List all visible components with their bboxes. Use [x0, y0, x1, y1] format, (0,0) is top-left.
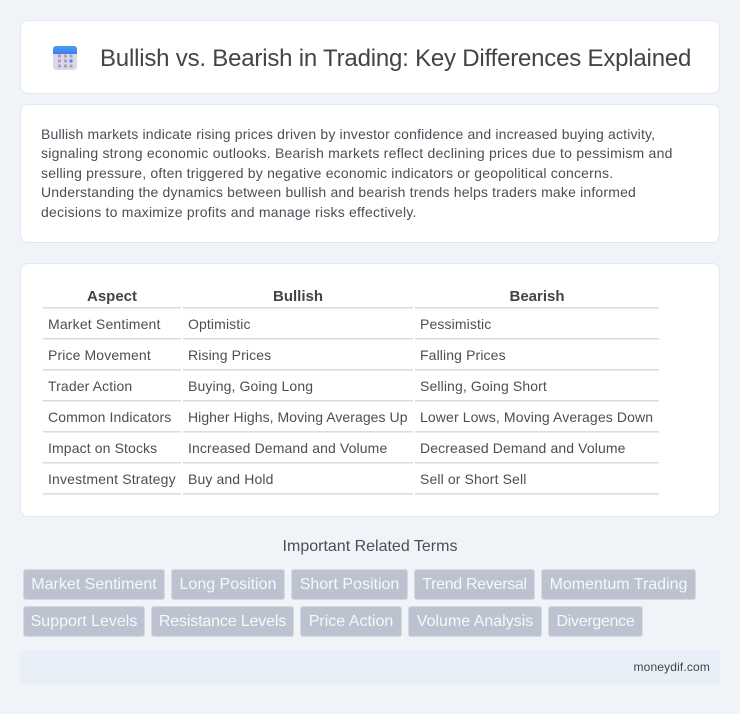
footer bar — [20, 650, 720, 684]
related terms tags — [23, 569, 696, 637]
comparison table: Sell or Short Sell — [420, 471, 526, 487]
related terms tags: Long Position — [180, 576, 276, 593]
intro paragraph: Bullish markets indicate rising prices driven by investor confidence and increased buying activity, — [41, 126, 655, 142]
related terms tags: Momentum Trading — [550, 576, 687, 593]
related terms tags: Support Levels — [31, 613, 137, 630]
comparison table: Trader Action — [48, 378, 132, 394]
comparison table — [43, 288, 659, 495]
comparison table: Price Movement — [48, 347, 151, 363]
intro text panel — [20, 104, 720, 243]
related terms heading: Important Related Terms — [283, 538, 457, 555]
related terms tags: Short Position — [300, 576, 399, 593]
intro paragraph: decisions to maximize profits and manage risks effectively. — [41, 204, 417, 220]
comparison table: Decreased Demand and Volume — [420, 440, 626, 456]
intro paragraph: signaling strong economic outlooks. Bearish markets reflect declining prices due to pessimism and — [41, 145, 673, 161]
comparison table: Common Indicators — [48, 409, 171, 425]
comparison table: Buying, Going Long — [188, 378, 313, 394]
comparison table: Rising Prices — [188, 347, 271, 363]
header panel — [20, 20, 720, 94]
comparison table: Bullish — [273, 288, 323, 305]
comparison table: Higher Highs, Moving Averages Up — [188, 409, 408, 425]
comparison table: Selling, Going Short — [420, 378, 547, 394]
comparison table: Lower Lows, Moving Averages Down — [420, 409, 653, 425]
intro paragraph: selling pressure, often triggered by negative economic indicators or geopolitical concerns. — [41, 165, 613, 181]
footer source: moneydif.com — [634, 660, 710, 674]
comparison table: Buy and Hold — [188, 471, 274, 487]
comparison table: Falling Prices — [420, 347, 506, 363]
comparison table: Aspect — [87, 288, 137, 305]
comparison table: Pessimistic — [420, 316, 491, 332]
title: Bullish vs. Bearish in Trading: Key Differences Explained — [100, 45, 691, 72]
related terms tags: Resistance Levels — [159, 613, 286, 630]
comparison table: Optimistic — [188, 316, 251, 332]
intro paragraph: Understanding the dynamics between bullish and bearish trends helps traders make informed — [41, 184, 636, 200]
related terms tags: Price Action — [309, 613, 393, 630]
related terms tags: Divergence — [557, 613, 634, 630]
intro paragraph — [41, 126, 673, 220]
comparison table: Bearish — [509, 288, 565, 305]
comparison table: Market Sentiment — [48, 316, 161, 332]
comparison table: Impact on Stocks — [48, 440, 157, 456]
comparison table: Investment Strategy — [48, 471, 176, 487]
comparison table panel — [20, 263, 720, 517]
related terms tags: Trend Reversal — [422, 576, 527, 593]
related terms tags: Volume Analysis — [417, 613, 533, 630]
icon: calendar — [53, 46, 77, 70]
comparison table: Increased Demand and Volume — [188, 440, 387, 456]
related terms tags: Market Sentiment — [31, 576, 157, 593]
